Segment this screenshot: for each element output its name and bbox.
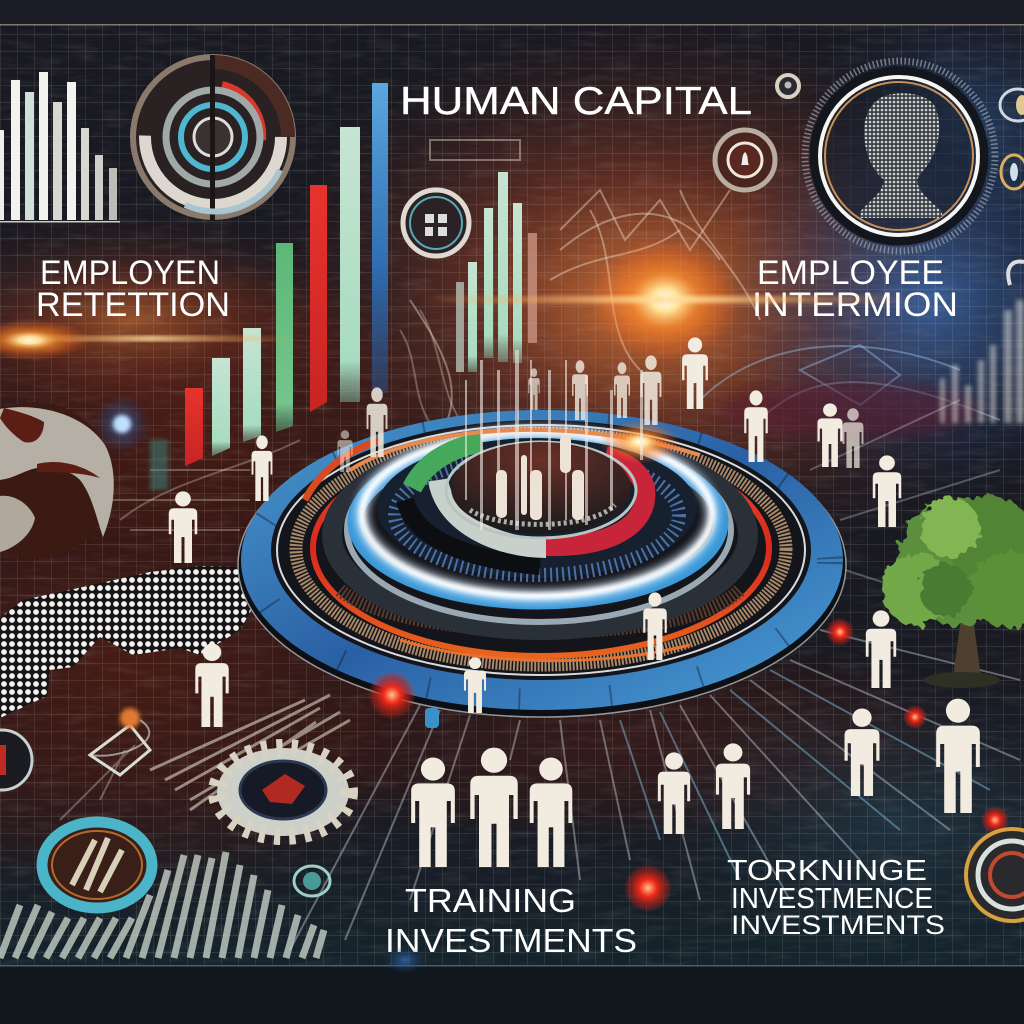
gear icon	[217, 748, 349, 836]
central ring platform	[238, 410, 846, 717]
bottom glow spot	[383, 946, 427, 974]
inner ring	[446, 442, 636, 538]
tangled icon, lower left	[90, 708, 150, 775]
silver ring	[347, 438, 731, 622]
abstract swirl strokes behind the charts	[110, 140, 1000, 530]
left-edge ring fragment	[0, 730, 32, 790]
lower brown streak band	[340, 590, 740, 631]
globe	[0, 402, 114, 558]
portrait circle with dotted head	[805, 61, 995, 251]
silver inner arc	[438, 480, 546, 548]
right-edge ring icon	[966, 829, 1024, 921]
central well	[451, 442, 631, 534]
label: employee retention	[36, 254, 230, 324]
label: torkninge investments: INVESTMENTS	[731, 910, 945, 940]
label: employee retention: RETETTION	[36, 286, 230, 324]
label: training investments: INVESTMENTS	[385, 922, 637, 959]
bottom orange glow	[400, 640, 690, 661]
ring icon, centre	[403, 190, 469, 256]
rising light beams	[465, 350, 643, 530]
label: torkninge investments: TORKNINGE	[727, 855, 927, 887]
dark platform face	[271, 420, 811, 680]
blue small marker	[425, 708, 439, 728]
bright highlight	[600, 420, 680, 464]
label: employee retention: EMPLOYEN	[40, 254, 220, 292]
black wedge	[405, 500, 540, 566]
inner dark tech band	[377, 438, 697, 578]
cyan blue ring	[355, 442, 721, 602]
platform underside	[238, 413, 846, 717]
dark grey ring	[332, 440, 748, 630]
right-edge small ovals	[1000, 89, 1024, 285]
bright streak bundle, lower left	[60, 695, 350, 820]
rail at well base	[470, 505, 615, 524]
label: training investments	[385, 882, 637, 959]
red glowing dots	[368, 618, 1009, 912]
circular gauge, top left	[133, 55, 293, 220]
red arc	[546, 456, 645, 546]
lens flares	[0, 238, 920, 490]
cream streak ring	[296, 433, 786, 665]
thin white rim	[277, 425, 805, 675]
outer blue rim	[241, 410, 843, 710]
right pale blurry bars	[940, 300, 1024, 423]
label: training investments: TRAINING	[405, 882, 576, 919]
label: torkninge investments: INVESTMENCE	[731, 883, 933, 915]
white glowing ring	[362, 432, 712, 596]
people	[169, 337, 980, 867]
inner blue dashes	[395, 455, 679, 575]
rays radiating from the platform	[290, 400, 1020, 950]
small ring icon, top	[777, 75, 799, 97]
label: employee intermion: INTERMION	[752, 286, 958, 324]
label: employee intermion: EMPLOYEE	[757, 254, 944, 292]
people in the well, elongated	[496, 435, 584, 520]
small eye icon	[294, 866, 330, 896]
green arc	[412, 442, 482, 488]
top-left bar chart	[0, 72, 120, 222]
colored bar chart rising to the right	[185, 83, 388, 466]
title: HUMAN CAPITAL	[400, 80, 752, 123]
rim segment dividers	[254, 422, 830, 702]
centre pale bar chart	[456, 172, 537, 372]
dark maroon haze under the right text	[720, 382, 980, 438]
lower-left striped bars	[0, 852, 324, 958]
white ring glow	[362, 432, 712, 596]
ring icon, badge	[715, 130, 775, 190]
tree	[882, 496, 1024, 688]
label: employee intermion	[752, 254, 958, 324]
label: torkninge investments	[727, 855, 945, 940]
left orange glow	[305, 440, 380, 500]
lower-left ring icon	[42, 822, 152, 908]
dotted world map	[0, 566, 253, 718]
red ring	[313, 440, 769, 656]
top orange arc	[350, 430, 700, 470]
